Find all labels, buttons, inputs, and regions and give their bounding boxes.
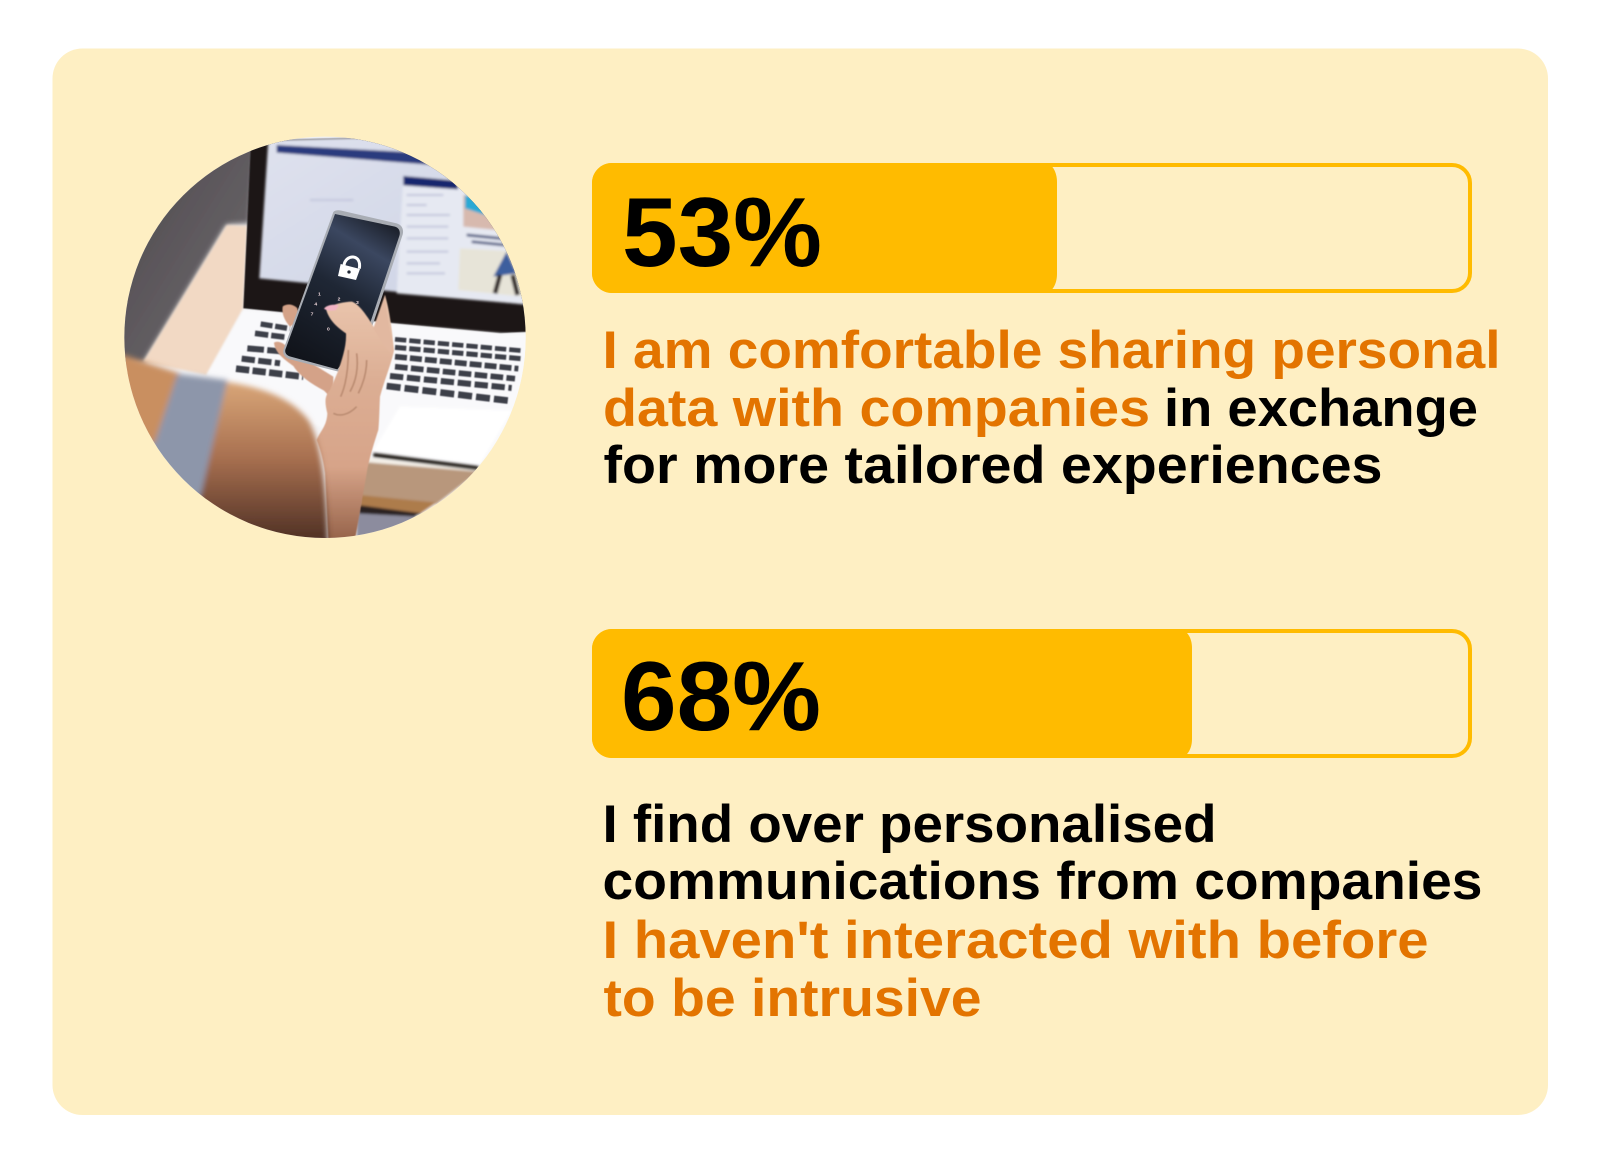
statement: over personalised communications: I find over personalised [602, 795, 1216, 854]
statement: over personalised communications [602, 795, 1482, 1028]
keypad digits: 0 [327, 327, 330, 333]
keypad digits: 2 [338, 296, 341, 302]
hand and forearm in front of phone [317, 295, 394, 540]
statement: comfortable sharing personal data: I am comfortable sharing personal [602, 321, 1500, 380]
statement: comfortable sharing personal data [602, 321, 1500, 495]
statement: over personalised communications: to be intrusive [604, 969, 982, 1028]
fingers behind phone [274, 305, 333, 400]
progress bar: 68% [592, 629, 1470, 758]
keyboard keys [236, 324, 522, 401]
statement: comfortable sharing personal data: data with companies [603, 379, 1150, 438]
statement: comfortable sharing personal data: for more tailored experiences [604, 436, 1382, 495]
keypad digits: 7 [311, 312, 314, 318]
statement: over personalised communications: I haven't interacted with before [602, 911, 1428, 970]
wall [124, 148, 256, 366]
statement: comfortable sharing personal data: in exchange [1164, 379, 1478, 438]
keypad digits: 3 [356, 300, 359, 306]
phone [283, 210, 403, 372]
keypad digits: 1 [318, 292, 321, 298]
laptop lid [243, 133, 533, 333]
progress bar: 53% [592, 163, 1470, 293]
keypad digits [311, 292, 359, 333]
value: 53%: 53% [622, 177, 822, 287]
laptop screen [259, 133, 533, 305]
statement: over personalised communications: communications from companies [602, 852, 1482, 911]
desk surface [143, 225, 247, 375]
lower desk [357, 455, 478, 540]
laptop deck [207, 310, 533, 465]
keypad digits: 4 [314, 302, 317, 308]
value: 68%: 68% [621, 641, 821, 751]
photo: hand holding locked smartphone in front of a laptop [113, 130, 533, 550]
icon: padlock [338, 257, 360, 280]
shoulder and sleeve [113, 352, 328, 550]
nail [324, 305, 339, 311]
